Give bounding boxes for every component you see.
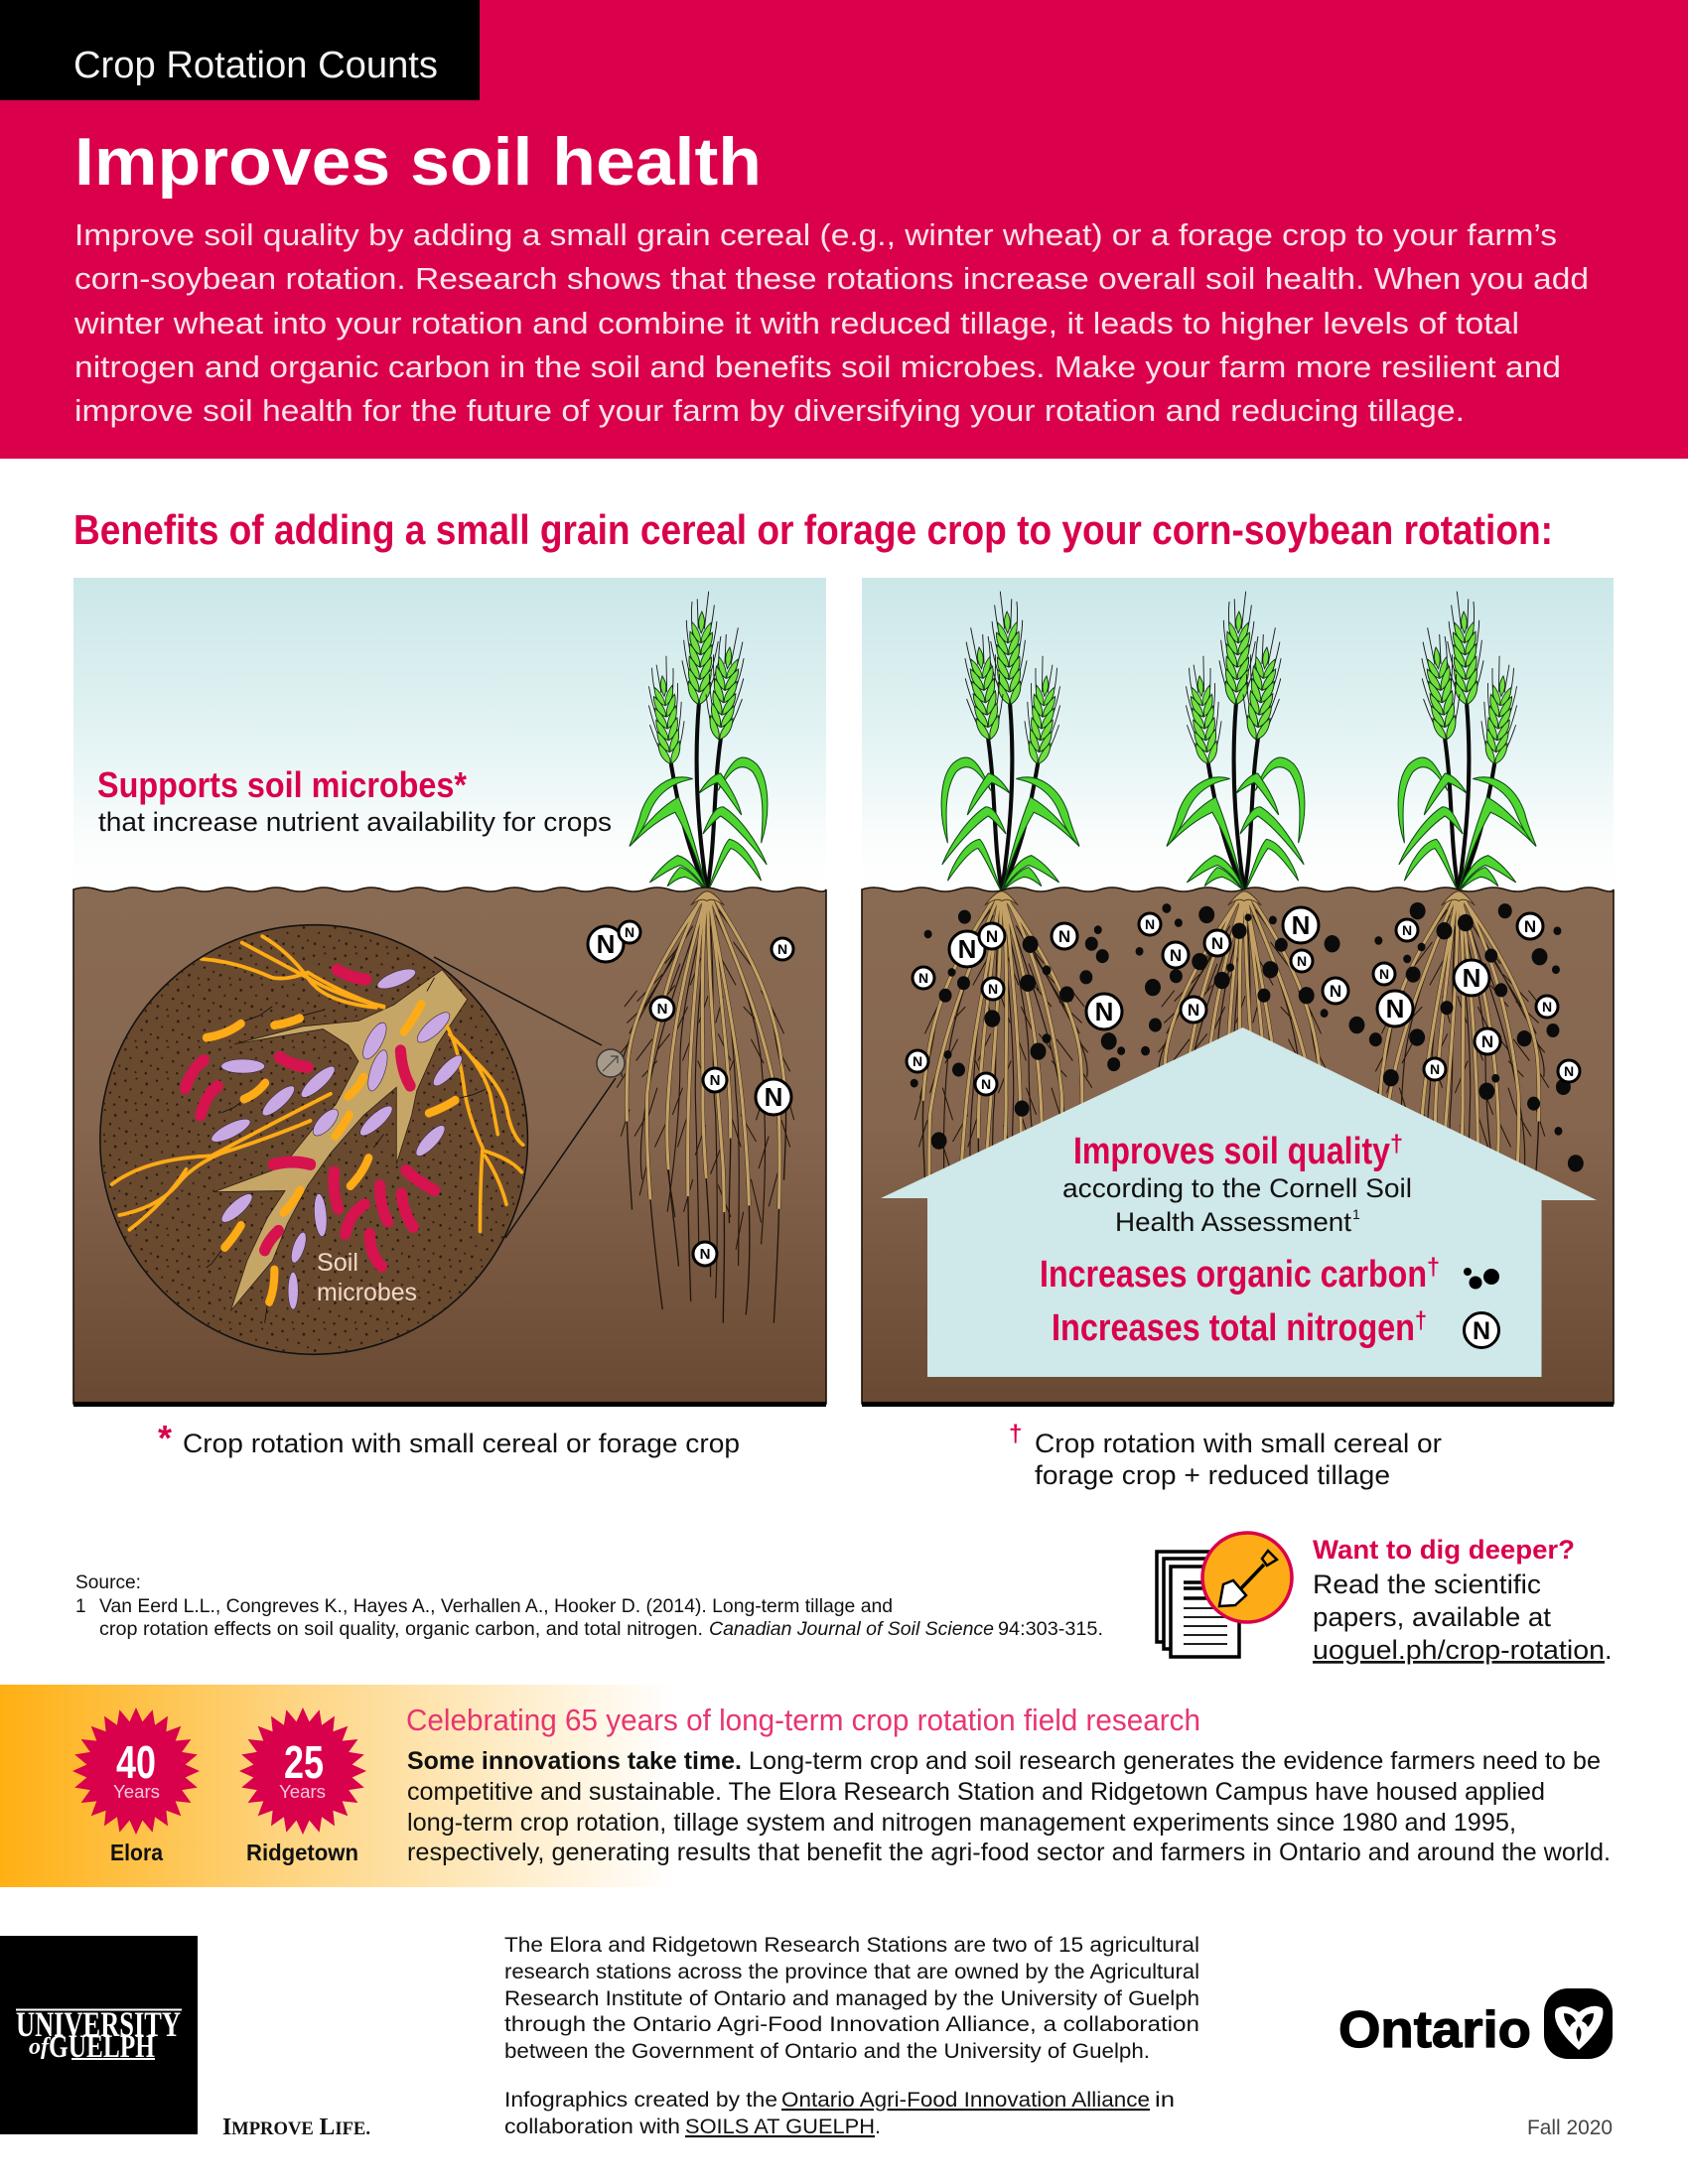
panel heading: that increase nutrient availability for crops <box>98 807 612 837</box>
research station note: between the Government of Ontario and the University of Guelph. <box>504 2039 1150 2063</box>
caption: rotation plus reduced tillage: forage crop + reduced tillage <box>1035 1460 1390 1490</box>
nitrogen markers: N <box>1524 917 1536 936</box>
house callout <box>881 1027 1597 1377</box>
soil microbes label: Soil <box>317 1249 358 1277</box>
nitrogen markers: N <box>1095 997 1113 1026</box>
panel: soil microbes <box>73 578 826 1407</box>
band paragraph: Some innovations take time. <box>407 1747 742 1775</box>
station names: Elora <box>110 1840 163 1865</box>
nitrogen markers: N <box>625 924 634 940</box>
research station note: collaboration with <box>504 2115 680 2138</box>
source citation: Source: <box>75 1572 141 1593</box>
intro paragraph: winter wheat into your rotation and combine it with reduced tillage, it leads to higher levels of total <box>73 306 1519 341</box>
icon: papers and shovel <box>1157 1533 1292 1657</box>
research station note: The Elora and Ridgetown Research Stations are two of 15 agricultural <box>504 1933 1199 1957</box>
nitrogen markers: N <box>1292 910 1310 940</box>
source citation: 1 <box>75 1596 86 1617</box>
station names: Ridgetown <box>246 1840 358 1865</box>
badge: Ridgetown 25 years: Years <box>279 1782 326 1802</box>
research station note: Infographics created by the <box>504 2088 777 2112</box>
fungal hyphae <box>112 936 523 1231</box>
panel heading: Supports soil microbes* <box>97 764 467 805</box>
sky <box>862 578 1614 891</box>
nitrogen markers: N <box>988 981 998 997</box>
edition date: Fall 2020 <box>1527 2116 1613 2139</box>
nitrogen markers: N <box>1430 1061 1440 1077</box>
nitrogen markers: N <box>1564 1063 1574 1079</box>
nitrogen markers: N <box>913 1053 922 1069</box>
badge: Elora 40 years <box>72 1707 200 1835</box>
band paragraph <box>407 1747 1611 1866</box>
sky <box>73 578 826 891</box>
soil microbes label: microbes <box>317 1279 417 1306</box>
nitrogen markers: N <box>958 934 976 964</box>
band paragraph: long-term crop rotation, tillage system and nitrogen management experiments since 1980 and 1995, <box>407 1809 1516 1837</box>
research station note: through the Ontario Agri-Food Innovation Alliance, a collaboration <box>504 2012 1199 2036</box>
caption: rotation plus reduced tillage: † <box>1009 1421 1022 1447</box>
series tab <box>0 0 480 100</box>
badge: Ridgetown 25 years <box>239 1707 366 1835</box>
intro paragraph: improve soil health for the future of your farm by diversifying your rotation and reducing tillage. <box>74 393 1465 428</box>
research station note <box>504 1933 1199 2138</box>
nitrogen markers: N <box>986 927 998 946</box>
nitrogen markers: N <box>1330 982 1341 1001</box>
nitrogen markers: N <box>918 970 928 986</box>
soil <box>73 887 826 1404</box>
caption: rotation with small cereal: * <box>158 1418 172 1458</box>
soil quality text: † <box>1390 1131 1403 1158</box>
title: Improves soil health <box>74 124 762 200</box>
nitrogen markers: N <box>1188 1001 1199 1020</box>
magnified soil circle <box>100 925 527 1354</box>
research station note: Research Institute of Ontario and managed by the University of Guelph <box>504 1986 1199 2010</box>
soil quality text: Improves soil quality <box>1073 1131 1390 1172</box>
organic carbon text: † <box>1427 1254 1440 1281</box>
icon: carbon particles <box>1464 1268 1499 1289</box>
nitrogen markers: N <box>1386 994 1404 1024</box>
nitrogen markers: N <box>765 1082 782 1112</box>
intro paragraph: nitrogen and organic carbon in the soil and benefits soil microbes. Make your farm more resilient and <box>74 349 1561 384</box>
nitrogen markers: N <box>700 1246 710 1263</box>
research anniversary band <box>0 1685 1611 1887</box>
red microbes <box>186 970 435 1267</box>
magnifier target <box>597 1049 625 1077</box>
panel: soil quality <box>862 578 1614 1407</box>
badge: Elora 40 years: Years <box>113 1782 160 1802</box>
further reading callout: uoguel.ph/crop-rotation <box>1313 1635 1605 1665</box>
caption: rotation with small cereal: Crop rotation with small cereal or forage crop <box>183 1429 740 1458</box>
assessment text <box>1062 1173 1412 1237</box>
nitrogen markers: N <box>1379 966 1389 982</box>
icon: nitrogen <box>1464 1312 1499 1348</box>
logo: University of Guelph: GUELPH <box>49 2029 155 2065</box>
nitrogen markers: N <box>710 1072 720 1089</box>
nitrogen markers: N <box>1463 963 1480 993</box>
nitrogen markers <box>907 907 1580 1095</box>
wheat plant <box>630 591 768 890</box>
nitrogen markers: N <box>1542 999 1552 1015</box>
band paragraph: competitive and sustainable. The Elora Research Station and Ridgetown Campus have housed applied <box>407 1778 1545 1806</box>
nitrogen markers: N <box>1402 922 1412 938</box>
research station note: . <box>875 2115 881 2138</box>
logo: Ontario: Ontario <box>1338 2001 1531 2059</box>
wheat plants <box>941 591 1536 890</box>
total nitrogen text: † <box>1415 1307 1427 1334</box>
logo: Ontario <box>1338 1988 1613 2059</box>
nitrogen markers: N <box>777 941 787 957</box>
research station note: research stations across the province that are owned by the Agricultural <box>504 1960 1199 1983</box>
band heading: Celebrating 65 years of long-term crop rotation field research <box>406 1703 1200 1737</box>
research station note: SOILS AT GUELPH <box>685 2115 875 2138</box>
nitrogen markers: N <box>597 929 615 959</box>
source citation: Canadian Journal of Soil Science <box>709 1619 994 1640</box>
nitrogen markers: N <box>1058 927 1070 946</box>
badge: Ridgetown 25 years: 25 <box>284 1736 324 1788</box>
research station note: Ontario Agri-Food Innovation Alliance <box>781 2088 1150 2112</box>
nitrogen markers: N <box>657 1001 667 1018</box>
source citation: crop rotation effects on soil quality, organic carbon, and total nitrogen. <box>99 1619 703 1640</box>
organic carbon particles <box>911 902 1584 1172</box>
source citation: 94:303-315. <box>998 1619 1103 1640</box>
root cross-section <box>214 970 468 1310</box>
plant roots <box>914 891 1549 1322</box>
logo: University of Guelph: of <box>29 2034 51 2060</box>
header banner <box>0 0 1688 459</box>
further reading callout <box>1313 1535 1613 1665</box>
further reading callout: papers, available at <box>1313 1602 1552 1632</box>
caption: rotation with small cereal <box>158 1418 740 1458</box>
icon: nitrogen: N <box>1473 1317 1490 1345</box>
logo: University of Guelph <box>0 1936 198 2134</box>
band paragraph: respectively, generating results that benefit the agri-food sector and farmers in Ontario and around the world. <box>407 1839 1611 1866</box>
series tab: Crop Rotation Counts <box>73 45 438 86</box>
plant roots <box>617 891 794 1322</box>
further reading callout: Want to dig deeper? <box>1313 1535 1575 1565</box>
badge: Elora 40 years: 40 <box>116 1736 156 1788</box>
soil cracks <box>207 978 486 1323</box>
assessment text: Health Assessment <box>1115 1207 1352 1237</box>
nitrogen markers: N <box>981 1076 991 1092</box>
orange microbes <box>207 1005 455 1302</box>
research station note: in <box>1155 2088 1175 2112</box>
nitrogen markers: N <box>1170 946 1182 965</box>
nitrogen markers: N <box>1211 934 1223 953</box>
further reading callout: . <box>1605 1635 1613 1665</box>
assessment text: 1 <box>1352 1206 1360 1222</box>
intro paragraph: corn-soybean rotation. Research shows that these rotations increase overall soil health. When you add <box>74 261 1589 296</box>
station names <box>110 1840 358 1865</box>
organic carbon text: Increases organic carbon <box>1040 1254 1427 1296</box>
assessment text: according to the Cornell Soil <box>1062 1173 1412 1203</box>
total nitrogen text: Increases total nitrogen <box>1052 1307 1415 1349</box>
panel baseline <box>73 1402 826 1407</box>
panel heading <box>97 764 612 837</box>
source citation <box>75 1572 1103 1640</box>
soil <box>862 887 1614 1404</box>
soil microbes label <box>317 1249 417 1306</box>
caption: rotation plus reduced tillage <box>1009 1421 1442 1490</box>
nitrogen markers <box>588 921 793 1266</box>
intro paragraph: Improve soil quality by adding a small grain cereal (e.g., winter wheat) or a forage crop to your farm’s <box>74 217 1557 252</box>
logo: University of Guelph: UNIVERSITY <box>16 2004 181 2044</box>
band paragraph: Long-term crop and soil research generates the evidence farmers need to be <box>749 1747 1601 1775</box>
tagline: IMPROVE LIFE. <box>222 2115 370 2140</box>
caption: rotation plus reduced tillage: Crop rotation with small cereal or <box>1035 1429 1442 1458</box>
nitrogen markers: N <box>1297 953 1307 969</box>
magnifier callout lines <box>434 957 616 1238</box>
panel baseline <box>862 1402 1614 1407</box>
source citation: Van Eerd L.L., Congreves K., Hayes A., Verhallen A., Hooker D. (2014). Long-term tillage and <box>99 1596 893 1617</box>
further reading callout: Read the scientific <box>1313 1570 1541 1599</box>
purple microbes <box>209 965 466 1309</box>
nitrogen markers: N <box>1145 916 1155 932</box>
nitrogen markers: N <box>1481 1032 1493 1051</box>
intro paragraph <box>73 217 1589 428</box>
